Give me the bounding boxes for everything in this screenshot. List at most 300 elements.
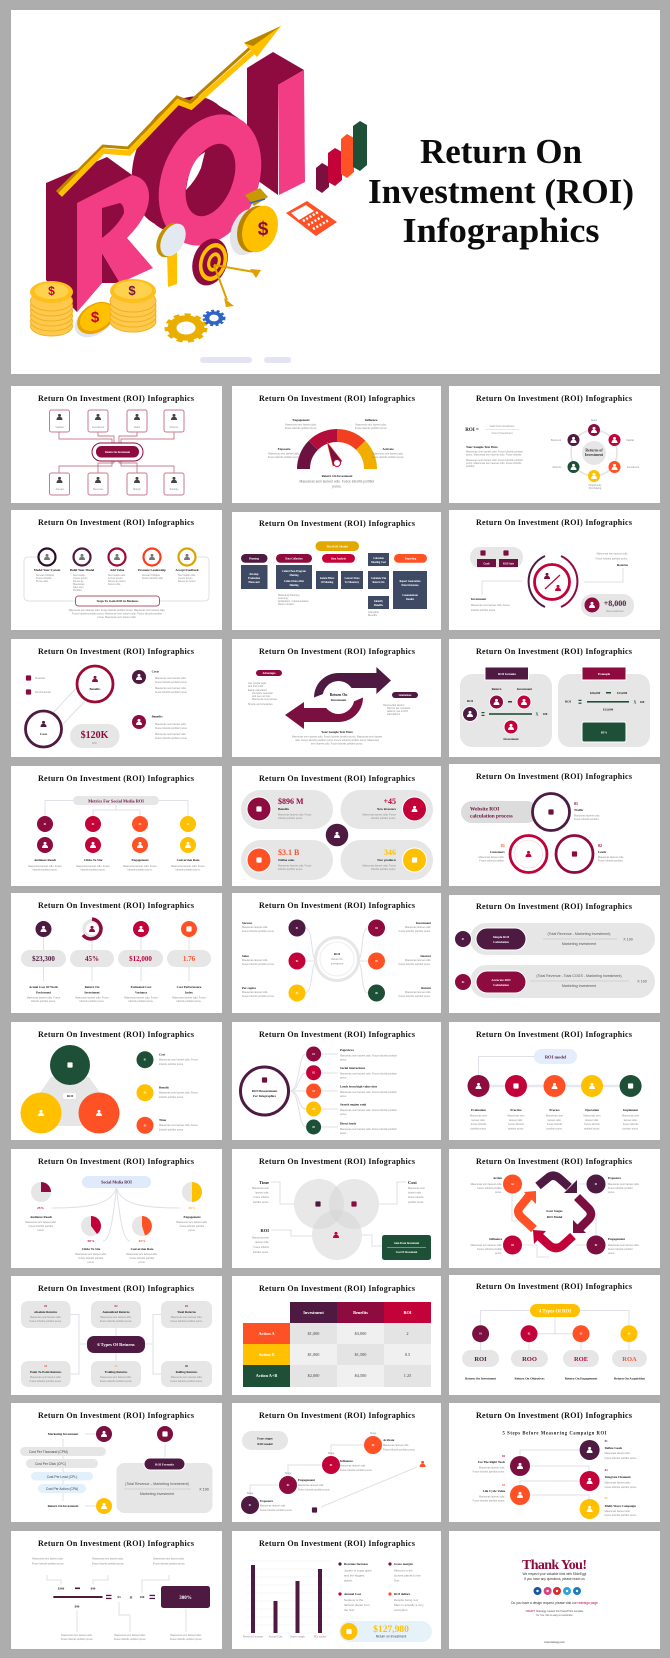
step text: Sed mattis odio (108, 574, 126, 577)
traffic circle: Traffic (574, 808, 584, 812)
costs circle (26, 711, 62, 747)
stage text: porttitor purus. (623, 1128, 639, 1130)
top boxes: Investment (92, 426, 104, 429)
box text: Meeting Cost (371, 561, 386, 564)
metric labels: lobortis porttitor purus. (176, 868, 201, 872)
single coin (69, 295, 121, 344)
center label: ROI Model (547, 1215, 562, 1219)
example panel: Example (598, 672, 611, 676)
icons (312, 1461, 426, 1513)
right step text: Fusce lobortis porttitor purus. (605, 1457, 637, 1460)
wine arrow (285, 698, 363, 729)
left step text (473, 1454, 506, 1502)
step text: purus. (340, 1076, 347, 1080)
step text: Sed mattis odio (178, 574, 196, 577)
ROI pill: $120K (81, 730, 109, 741)
time text: laoreet odio. (255, 1192, 269, 1194)
metric labels: Maecenas laoreet odio. Fusce (171, 865, 205, 868)
formula: $90 (91, 1586, 96, 1590)
stat text: New investors (377, 807, 397, 811)
number circles: 02 (528, 1333, 531, 1336)
legend list: Maecenas sem laoreet odio. Fusce (159, 1058, 199, 1062)
box text: Calculate The (371, 577, 387, 580)
stage circles: 04 (372, 1444, 375, 1447)
limitations: Hard-to-find factors (383, 704, 405, 707)
big ring: ROI Measurement (252, 1089, 278, 1093)
right labels: Return (421, 986, 431, 990)
metric labels: lobortis porttitor purus. (128, 868, 153, 872)
benefits list: Maecenas sem laoreet odio. (155, 733, 187, 736)
stage text: Fusce lobortis porttitor (477, 1187, 502, 1190)
panel: slide 4 process steps: Return On Investment (ROI) Infographics (38, 518, 194, 527)
connectors (70, 1314, 161, 1374)
stage text: Implement (623, 1108, 639, 1112)
curved connectors (52, 1188, 180, 1241)
legend list: 01 (144, 1059, 147, 1062)
left step text: Life Cycle Value (483, 1489, 506, 1493)
step icons (44, 554, 190, 560)
right step text: Fusce lobortis porttitor purus. (605, 1514, 637, 1517)
subtitle: 5 Steps Before Measuring Campaign ROI (502, 1432, 607, 1436)
credit: for You. this is easy to customize (536, 1614, 573, 1617)
left labels: Success (242, 921, 253, 925)
formula: ROI = (465, 428, 479, 433)
stage text: laoreet odio. (548, 1119, 562, 1122)
heading: Return On (420, 132, 582, 171)
box text: Plans and (249, 581, 260, 584)
step text: Build Your Model (70, 568, 94, 572)
right step text (605, 1439, 637, 1517)
step text: Promote Leadership (138, 568, 166, 572)
stage text: Activate (383, 1438, 395, 1442)
connectors (520, 1450, 589, 1499)
legend list: lobortis porttitor purus. (159, 1096, 184, 1099)
box text: Meeting (289, 584, 299, 587)
panel: slide 2 gauge (232, 386, 441, 503)
table: Action A (258, 1331, 275, 1336)
stage text: Exposure (608, 1176, 621, 1180)
caption: odio. Fusce lobortis porttitor purus. Fusce lobortis porttitor purus. Maecenas (295, 739, 380, 742)
cycle: Investment (627, 466, 639, 469)
bottom boxes: Point To Point Returns (30, 1370, 62, 1374)
step text: Leads from high value sites (340, 1084, 378, 1088)
metric text: purus. (189, 1229, 196, 1232)
panel: slide 9 ROI formula (449, 639, 660, 757)
stage text: Fusce lobortis porttitor purus. (298, 1488, 331, 1492)
stat text: New products (377, 858, 397, 862)
panel: slide 6 returns and investment (449, 510, 660, 630)
step text: Donec ac lorem (108, 580, 126, 583)
formula panel (116, 1458, 212, 1513)
connectors (271, 1182, 406, 1246)
cycle: Investment (585, 453, 604, 457)
formula panel: Return (492, 687, 502, 691)
table: $4,500 (355, 1373, 366, 1379)
leads circle: Leads (598, 850, 607, 854)
connectors (305, 928, 368, 993)
labels: Maecenas sem laoreet odio. (372, 452, 404, 456)
step text: Aenean tristique (142, 574, 161, 577)
marketing investment row (48, 1426, 173, 1442)
legend: Neptune is the (344, 1598, 364, 1602)
formula panel (460, 667, 552, 747)
bottom boxes: Fusce lobortis porttitor purus. (100, 1380, 132, 1383)
panel: slide 9 ROI formula: Return On Investment (ROI) Infographics (476, 647, 632, 656)
top boxes (21, 1301, 212, 1328)
financial legend: Financial (35, 677, 45, 680)
formula panel: X 100 (199, 1488, 209, 1492)
financial legend (26, 675, 51, 695)
stat text: lobortis porttitor purus. (371, 817, 396, 820)
metric text (25, 1215, 208, 1264)
limitations: Limitations (399, 694, 411, 697)
captions top: Fusce lobortis porttitor purus. (92, 1562, 124, 1566)
panel: slide 28 ROI worked formula: Return On Investment (ROI) Infographics (38, 1539, 194, 1548)
type labels: Return On Investment (465, 1376, 497, 1380)
costs circle: Costs (40, 732, 48, 736)
formula panel: 100 (543, 712, 548, 716)
legend list: Time (159, 1118, 167, 1122)
cost text: Maecenas sem (408, 1187, 425, 1190)
captions top: Maecenas sem laoreet odio. (92, 1558, 124, 1560)
panel: slide 8 twin arrows: Return On Investment (ROI) Infographics (259, 647, 415, 656)
table: $2,000 (308, 1373, 319, 1379)
right labels: Investment (416, 921, 432, 925)
metrics pill (73, 796, 159, 805)
caption: purus. Maecenas sem laoreet odio. (97, 616, 137, 619)
box text: Data Outcomes (401, 584, 419, 587)
legend: cold place (394, 1608, 408, 1612)
stat text (278, 797, 397, 871)
gray pill with goals (470, 547, 523, 568)
step circles: 01 (312, 1053, 316, 1056)
magnifier (151, 218, 191, 287)
value pills: 1.76 (183, 955, 196, 963)
cycle: Capital (626, 439, 634, 442)
benefits list: Maecenas sem laoreet odio. (155, 723, 187, 726)
connectors (290, 1054, 338, 1127)
stage text: Fusce lobortis porttitor purus. (383, 1448, 416, 1452)
right step text: 03 (605, 1468, 608, 1472)
labels: Engagement (292, 418, 310, 422)
panel: slide 1 hub diagram (11, 386, 222, 503)
metric captions: Actual Cost Of Work (29, 985, 58, 989)
panel: slide 4 process steps (11, 510, 222, 630)
step text: Maecenas sem laoreet odio. Fusce lobortis porttitor (340, 1128, 397, 1131)
cost pills: Cost Per Thousand (CPM) (29, 1450, 68, 1454)
caption (69, 609, 166, 619)
stat text: Maecenas laoreet odio. Fusce (362, 814, 397, 816)
percent labels: 25% (37, 1206, 44, 1210)
stage text: Influence (340, 1459, 353, 1463)
percent labels: 45% (138, 1239, 146, 1243)
left labels: Sales (242, 954, 250, 958)
text block: purus. Maecenas sem laoreet odio. Fusce lobortis (466, 454, 522, 456)
left labels (242, 921, 275, 998)
ROI text: ROI (260, 1228, 269, 1233)
metric labels: lobortis porttitor purus. (81, 868, 106, 872)
process pill: calculation process (470, 814, 513, 820)
cost text: Fusce lobortis (408, 1196, 424, 1199)
right step text: 05 (605, 1496, 608, 1500)
top boxes: 01 (44, 1304, 48, 1308)
customers circle: Maecenas laoreet odio. (479, 856, 505, 859)
top boxes: Annualized Returns (102, 1310, 130, 1314)
caption: Fusce lobortis porttitor purus. Maecenas sem laoreet odio. Fusce lobortis porttitor (72, 612, 162, 616)
top icons (36, 919, 197, 939)
panel: slide 22 types of returns: Return On Investment (ROI) Infographics (38, 1284, 194, 1293)
panel: slide 26 staircase stages: Return On Investment (ROI) Infographics (259, 1411, 415, 1420)
costs list (132, 670, 188, 694)
social icons (534, 1587, 581, 1595)
limitations: data for use in ROI (387, 710, 408, 713)
stage text: Maecenas sem (508, 1114, 524, 1118)
metric captions (27, 985, 206, 1003)
customers pill: New customers (606, 610, 624, 613)
box text (248, 557, 421, 607)
step text: purus. (340, 1058, 347, 1062)
left labels: Fusce lobortis porttitor purus. (242, 963, 275, 966)
stat text: lobortis porttitor purus. (278, 817, 303, 820)
right step text: Define Goals (605, 1446, 623, 1450)
financial legend: Non-Financial (35, 691, 51, 694)
heading (368, 132, 634, 250)
example panel: X (634, 699, 637, 704)
bottom boxes: Maecenas sem laoreet odio. (171, 1376, 203, 1379)
right step text: Maecenas laoreet odio. (605, 1452, 631, 1455)
link lines (53, 685, 89, 724)
triangle (37, 1077, 103, 1126)
stage text: Maecenas sem laoreet odio. (608, 1183, 640, 1186)
metric captions: lobortis porttitor purus. (129, 1000, 154, 1003)
connectors (59, 432, 174, 473)
legend list (136, 1051, 199, 1134)
stage text: Fusce lobortis (623, 1123, 639, 1126)
metric text: Conversion Rate (131, 1247, 154, 1251)
example panel: $26,000 (590, 691, 601, 695)
panel: slide 20 venn diagram (232, 1149, 441, 1268)
legend list: Cost (159, 1052, 166, 1056)
panel: slide 13 performance metrics: Return On Investment (ROI) Infographics (38, 901, 194, 910)
number circles: 03 (580, 1333, 583, 1336)
ROI pill: ROI (92, 742, 97, 745)
stat text: lobortis porttitor purus. (371, 868, 396, 871)
investment text: lobortis porttitor purus. (471, 609, 496, 612)
cost pills (20, 1447, 106, 1493)
panel: hero title slide (11, 10, 660, 374)
labels: Return On Investment (322, 474, 353, 478)
example panel: 100 (640, 700, 645, 704)
panel: slide 30 thank you (449, 1531, 660, 1649)
benefits list: Fusce lobortis porttitor purus. (155, 737, 188, 740)
cycle (551, 419, 639, 490)
connectors (45, 800, 188, 816)
bottom boxes: Maecenas sem laoreet odio. (100, 1376, 132, 1379)
social pill (82, 1176, 151, 1188)
stage text: Maecenas sem (622, 1114, 639, 1118)
stage nodes: 02 (595, 1244, 598, 1247)
center pill (87, 1336, 145, 1353)
result box (161, 1586, 210, 1608)
metric captions: lobortis porttitor purus. (177, 1000, 202, 1003)
example panel: ROI (565, 700, 572, 704)
table: Investment (303, 1310, 324, 1315)
heading: Investment (ROI) (368, 172, 634, 211)
cycle: Returns (553, 466, 562, 469)
metric captions: Return On (85, 985, 100, 989)
box text: Convert Data (344, 577, 360, 580)
right step text: Maecenas laoreet odio. (605, 1510, 631, 1513)
formula panel: Marketing Investment (140, 1492, 174, 1496)
type labels: Return On Engagement (565, 1376, 598, 1380)
benefits circle (77, 666, 113, 702)
cycle: Opportunity (589, 484, 602, 487)
connectors (47, 1575, 186, 1632)
stat text: $3.1 B (278, 848, 300, 857)
model pill: ROI model (545, 1054, 567, 1060)
box text: Report Generation (400, 580, 421, 583)
types pill (530, 1304, 580, 1317)
stage nodes: 04 (511, 1183, 514, 1186)
costs list: Costs (152, 670, 160, 674)
stage circles (241, 1436, 382, 1514)
metric captions: Investment (84, 990, 101, 994)
box text: Return On (372, 581, 385, 584)
captions bottom: Fusce lobortis porttitor purus. (61, 1638, 93, 1641)
formula panel: Investment (503, 737, 520, 741)
process pill (461, 801, 538, 823)
advantages: and see net loss (252, 695, 271, 698)
stage text: Maecenas sem (470, 1114, 487, 1118)
coin stack left: $ (48, 284, 55, 298)
thin links (512, 1184, 596, 1257)
stage text: Fusce lobortis porttitor (608, 1187, 633, 1190)
panel: slide 5 ROI model flow (232, 512, 441, 630)
table (243, 1302, 431, 1387)
stage text: Practice (510, 1108, 522, 1112)
metric captions: Maecenas laoreet odio. Fusce (124, 996, 158, 1000)
step text: Lorem ipsum (178, 577, 192, 580)
formula panel: ROI formula (498, 672, 516, 676)
leads circle: Fusce lobortis porttitor. (598, 860, 624, 862)
arrow heads (524, 1180, 586, 1244)
right step text: 01 (605, 1439, 608, 1443)
ROI text (252, 1228, 270, 1254)
acronym pills (462, 1350, 647, 1367)
top boxes: Returns (170, 426, 179, 429)
right circles: 06 (375, 992, 378, 995)
panel: slide 10 social media metrics: Return On Investment (ROI) Infographics (38, 774, 194, 783)
acronym pills: ROI (474, 1356, 487, 1363)
captions bottom (61, 1634, 202, 1641)
box text: Meeting (289, 574, 299, 577)
text block: Maecenas sem laoreet odio. Fusce lobortis porttitor (466, 450, 523, 454)
investment text (471, 597, 511, 612)
box text: Isolate Effect (320, 577, 334, 580)
stat text: Maecenas laoreet odio. Fusce (362, 864, 397, 868)
type labels (465, 1376, 645, 1380)
center circle (322, 681, 354, 714)
connectors (481, 1310, 629, 1350)
table: 0.5 (405, 1352, 410, 1357)
example panel: 85% (601, 730, 607, 734)
top boxes: Fusce lobortis porttitor purus. (30, 1320, 62, 1323)
panel: slide 14 ROI branches: Return On Investment (ROI) Infographics (259, 901, 415, 910)
money bag (224, 188, 284, 260)
captions top (32, 1558, 185, 1566)
box text: Of Meeting (321, 581, 334, 584)
labels: Fusce lobortis porttitor purus. (355, 427, 387, 430)
labels: Fusce lobortis porttitor purus. (285, 427, 317, 430)
step text: Fusce lobortis odio (142, 577, 164, 580)
top boxes: Sales (134, 426, 141, 429)
accurate ROI row: Calculation (493, 983, 509, 987)
panel: slide 21 four stages cycle: Return On Investment (ROI) Infographics (476, 1157, 632, 1166)
stage text: Maecenas sem (546, 1114, 563, 1118)
legend: Revenue Increase (344, 1562, 369, 1566)
cost text: Cost (408, 1180, 417, 1185)
box text: Evaluation (248, 577, 261, 580)
left circles: 02 (296, 960, 299, 963)
panel: slide 26 staircase stages (232, 1403, 441, 1522)
step text: purus. (340, 1132, 347, 1135)
legend (338, 1562, 424, 1612)
step text: Accept Feedback (175, 568, 199, 572)
metric text: purus. (139, 1261, 146, 1264)
captions top: Maecenas sem laoreet odio. (153, 1558, 185, 1560)
metric captions: Index (185, 990, 193, 994)
list: Learning (278, 597, 288, 600)
stage text (470, 1108, 639, 1130)
panel: slide 27 five steps: Return On Investment (ROI) Infographics (476, 1411, 632, 1420)
labels: Maecenas sem laoreet odio. (268, 452, 300, 456)
costs list: Fusce lobortis porttitor purus. (155, 691, 188, 694)
box text: Benefits (374, 604, 383, 607)
right circles (368, 920, 385, 1002)
metric text: Maecenas sem laoreet odio. (75, 1253, 107, 1256)
center pill: Return On Investment (105, 451, 130, 454)
stage text: Action (493, 1176, 502, 1180)
coin stack right: $ (128, 283, 136, 298)
labels: Fusce lobortis porttitor purus. (372, 456, 404, 459)
metric text: Clicks To Site (82, 1247, 101, 1251)
top boxes: Fusce lobortis porttitor purus. (170, 1320, 203, 1323)
left circles (288, 920, 306, 1002)
rising arrow (57, 26, 281, 195)
cost pills: Cost Per Click (CPC) (35, 1462, 66, 1466)
return row: Return On Investment (48, 1504, 79, 1508)
coin stack left (30, 281, 73, 336)
step text: Maecenas sem laoreet odio. Fusce lobortis porttitor (340, 1091, 397, 1094)
step circles: 04 (312, 1108, 316, 1111)
investment text: Investment (471, 597, 487, 601)
number circles: 01 (44, 823, 47, 826)
stage text: porttitor purus. (508, 1128, 524, 1130)
stems (44, 937, 189, 981)
text block: porttitor. (466, 465, 475, 468)
panel: slide 12 website ROI process (449, 764, 660, 886)
metric labels: Audience Reach (34, 858, 56, 862)
stage pill (242, 1431, 288, 1450)
step text: purus. (340, 1095, 347, 1098)
loop connector (24, 557, 209, 601)
metric labels: Conversion Rate (177, 858, 200, 862)
labels: Exposure (278, 447, 291, 451)
left step text: Maecenas laoreet odio. (479, 1496, 505, 1498)
panel: slide 28 ROI worked formula (11, 1531, 222, 1649)
left step text: Use The Right Tools (478, 1460, 506, 1464)
labels: Maecenas sem laoreet odio. (285, 424, 317, 426)
